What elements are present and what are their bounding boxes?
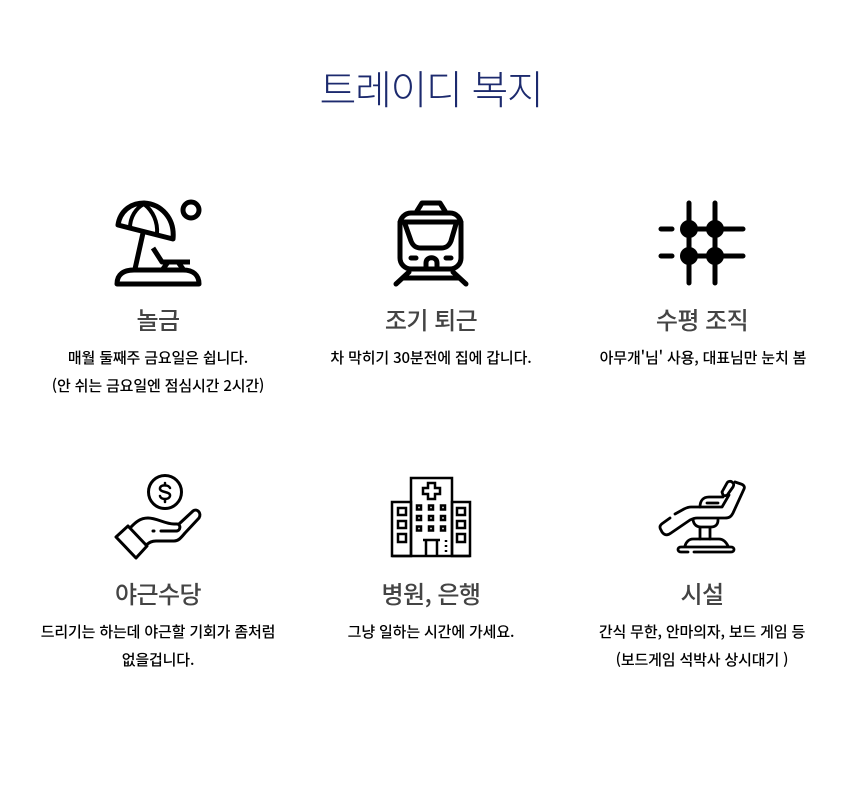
text block: 그냥 일하는 시간에 가세요. — [348, 621, 514, 642]
title: 트레이디 복지 — [320, 58, 542, 116]
text block: 없을겁니다. — [122, 649, 194, 670]
heading: 수평 조직 — [656, 301, 748, 336]
text block: 아무개'님' 사용, 대표님만 눈치 봄 — [600, 347, 806, 368]
panel: 병원, 은행 — [348, 575, 514, 642]
text block: 드리기는 하는데 야근할 기회가 좀처럼 — [41, 621, 275, 642]
panel: 야근수당 — [41, 575, 275, 670]
text block — [41, 621, 275, 670]
heading: 놀금 — [136, 301, 180, 336]
panel: 수평 조직 — [600, 301, 806, 368]
text block: 매월 둘째주 금요일은 쉽니다. — [68, 347, 248, 368]
heading: 병원, 은행 — [382, 575, 480, 610]
text block: 간식 무한, 안마의자, 보드 게임 등 — [599, 621, 805, 642]
text block — [599, 621, 805, 670]
text block: (보드게임 석박사 상시대기 ) — [616, 649, 788, 670]
text block: 차 막히기 30분전에 집에 갑니다. — [330, 347, 532, 368]
panel: 놀금 — [52, 301, 264, 396]
panel: 시설 — [599, 575, 805, 670]
heading: 시설 — [680, 575, 724, 610]
heading: 야근수당 — [115, 575, 201, 610]
panel: 조기 퇴근 — [330, 301, 532, 368]
text block: (안 쉬는 금요일엔 점심시간 2시간) — [52, 375, 264, 396]
heading: 조기 퇴근 — [385, 301, 477, 336]
text block — [52, 347, 264, 396]
